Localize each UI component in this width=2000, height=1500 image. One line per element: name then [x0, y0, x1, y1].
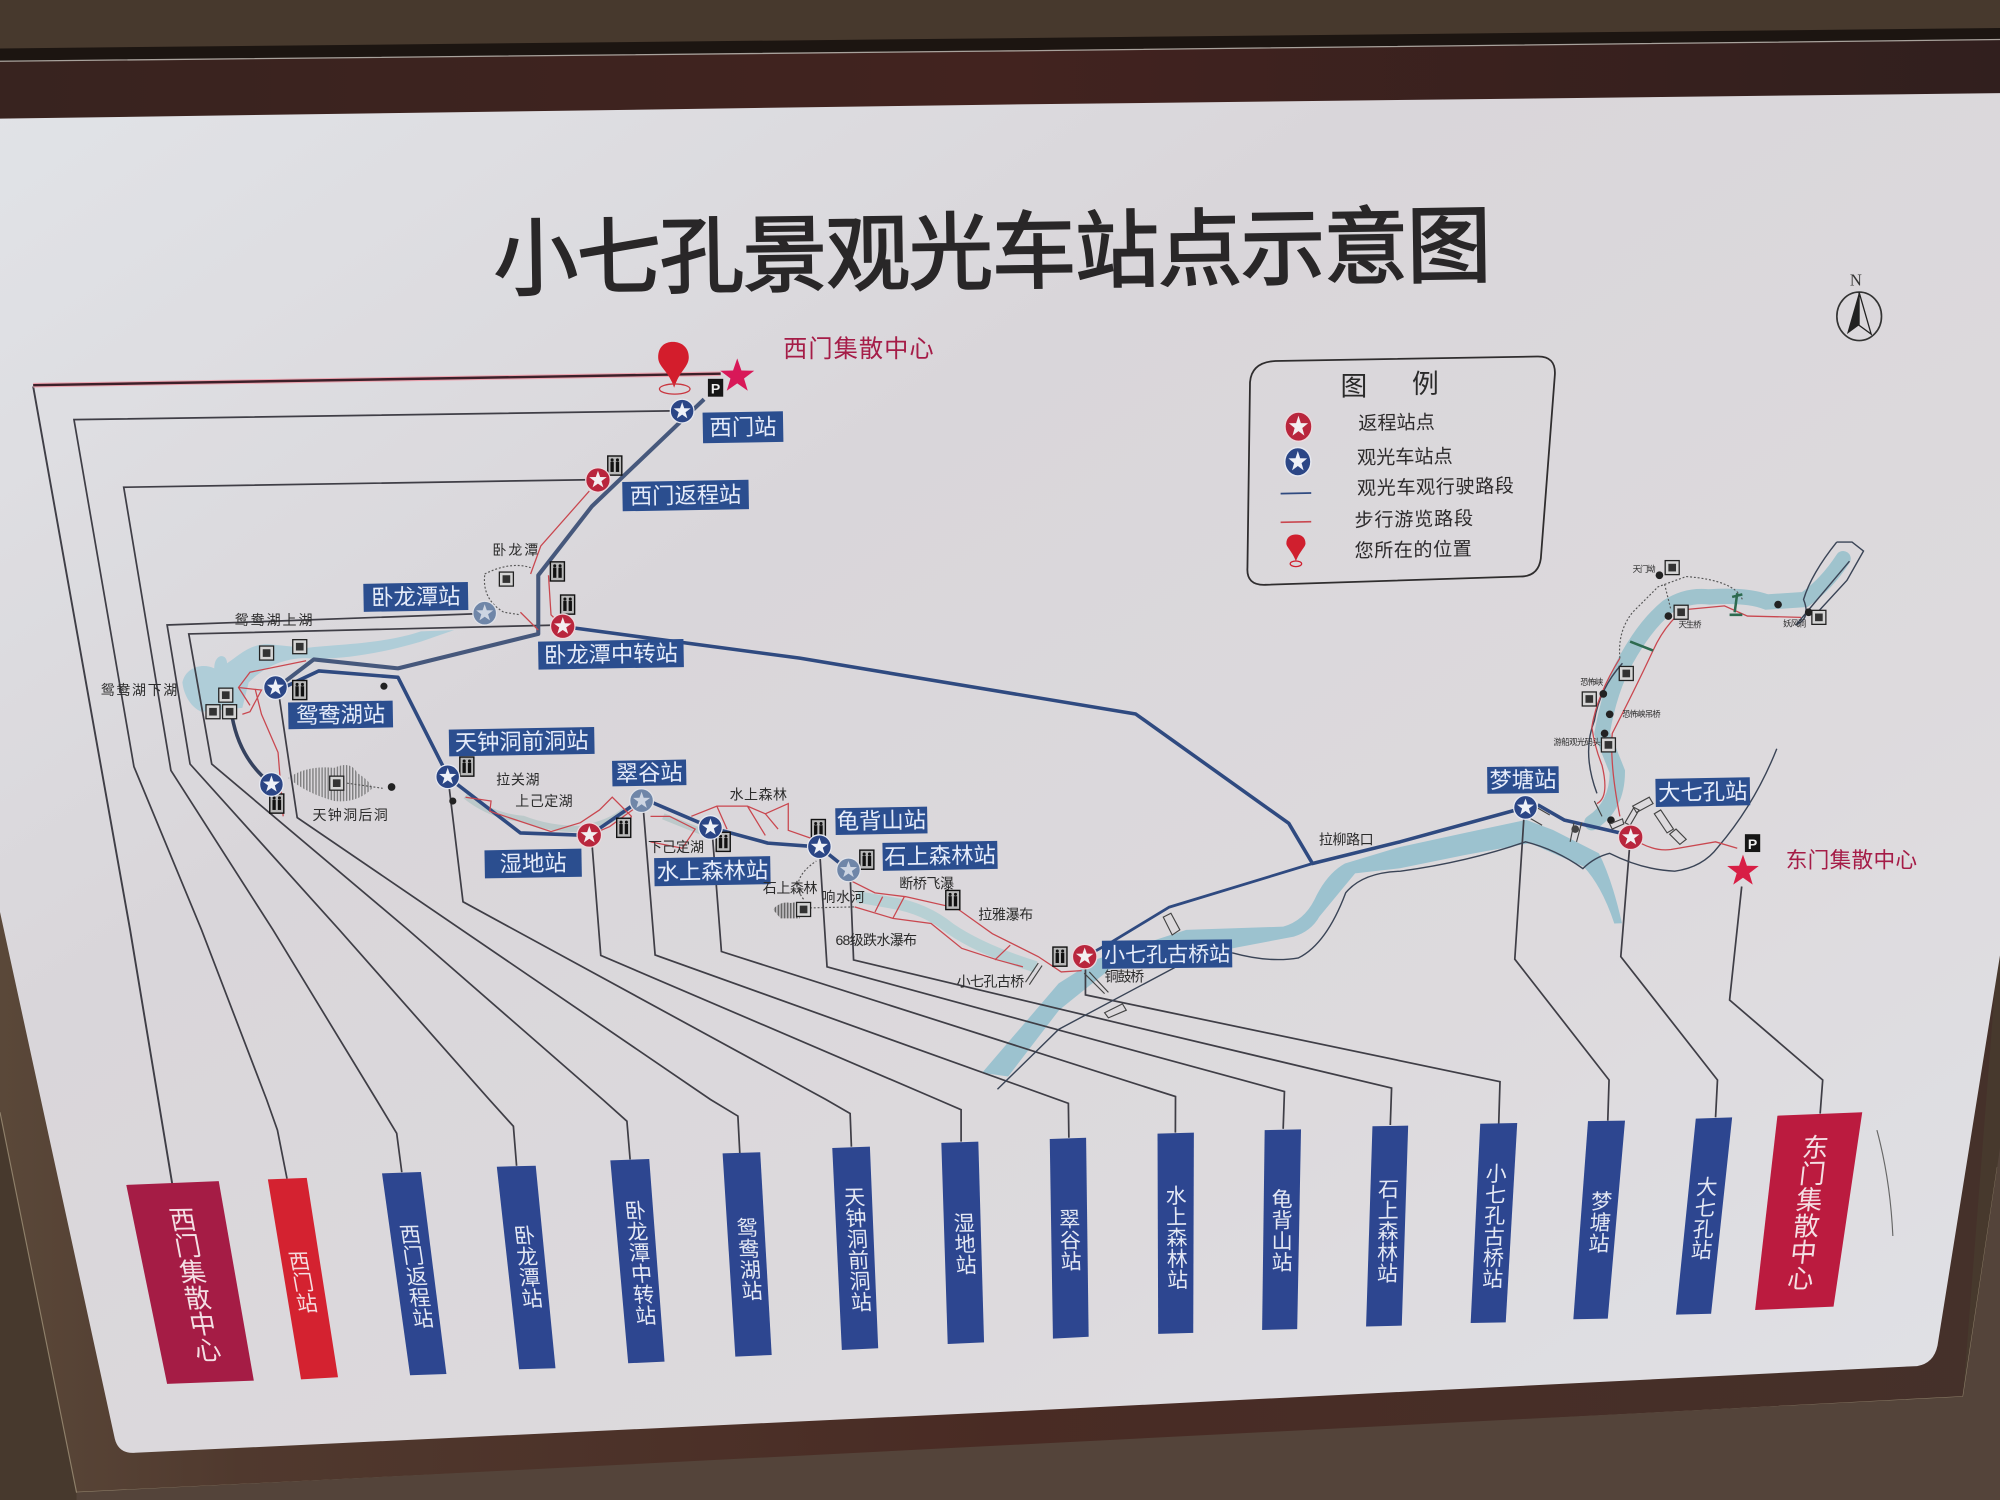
legend item: return station: [1285, 412, 1435, 441]
bar: wolongtan transfer station: 卧龙潭中转站: [621, 1199, 657, 1326]
small scenic labels: 恐怖峡: [1580, 677, 1604, 687]
small scenic labels: 小七孔古桥: [957, 974, 1024, 990]
station name labels: 小七孔古桥站: [1104, 942, 1230, 967]
west gate parking icon: [708, 379, 723, 397]
bar: west gate station: 西门站: [284, 1250, 319, 1314]
bar: west gate center: 西门集散中心: [163, 1206, 223, 1363]
station name labels: 天钟洞前洞站: [455, 728, 589, 756]
bar: west return station: 西门返程站: [395, 1223, 435, 1329]
panel scratch: [1877, 1130, 1893, 1236]
dotted trails: [347, 565, 1742, 908]
bar: guibei mountain station: [1262, 1129, 1301, 1330]
walking paths: [239, 491, 1801, 972]
station name labels: 卧龙潭站: [371, 584, 461, 610]
station name labels: 西门返程站: [630, 482, 742, 509]
station name labels: 大七孔站: [1658, 779, 1748, 806]
west gate collection line: [33, 374, 721, 385]
west gate center label: 西门集散中心: [783, 336, 934, 363]
bar: tianzhong cave station: 天钟洞前洞站: [841, 1186, 873, 1313]
water: Yuanyang lake: [182, 630, 454, 712]
bar: guibei mountain station: 龟背山站: [1269, 1187, 1293, 1273]
station name labels: [288, 411, 1750, 969]
bar: cuigu station: [1050, 1138, 1089, 1339]
small scenic labels: 天钟洞后洞: [312, 807, 388, 823]
legend item: you are here: [1286, 534, 1472, 567]
station name labels: 水上森林站: [656, 858, 768, 885]
bar: xiaoqikong bridge station: 小七孔古桥站: [1479, 1162, 1507, 1290]
legend: 例: [1412, 369, 1439, 399]
small scenic labels: [101, 542, 1806, 990]
east gate star: [1727, 855, 1759, 885]
bar: yuanyang lake station: [723, 1152, 772, 1357]
small scenic labels: 上己定湖: [515, 793, 573, 809]
title: 小七孔景观光车站点示意图: [493, 199, 1492, 307]
legend: 图: [1341, 371, 1367, 401]
cave hatch: Tianzhong back cave: [288, 765, 372, 801]
green footbridge figure: [1730, 593, 1742, 615]
shuttle road network: [232, 399, 1630, 957]
small scenic labels: 下己定湖: [648, 839, 704, 855]
bar: west gate center: [126, 1181, 254, 1384]
bottom station index bars: [126, 1112, 1862, 1384]
legend item: shuttle station: [1285, 446, 1453, 476]
bar: yuanyang lake station: 鸳鸯湖站: [733, 1216, 763, 1302]
bar: mengtang station: 梦塘站: [1585, 1190, 1613, 1254]
station name labels: 石上森林站: [884, 843, 996, 869]
legend item: you are here: 您所在的位置: [1354, 538, 1472, 562]
bar: east gate center: [1755, 1112, 1862, 1310]
water: waterfall stream: [857, 897, 1036, 967]
bar: daqikong station: 大七孔站: [1688, 1175, 1718, 1261]
small scenic labels: 天生桥: [1679, 620, 1702, 630]
legend item: shuttle road segment: 观光车观行驶路段: [1357, 475, 1514, 500]
station markers: [260, 399, 1643, 969]
east gate parking icon: [1745, 834, 1760, 852]
small scenic labels: 水上森林: [730, 787, 787, 803]
west gate location pin: [658, 342, 690, 394]
bar: west gate station: [268, 1178, 338, 1379]
bar: wetland station: [941, 1142, 984, 1344]
small scenic labels: 天门坳: [1633, 564, 1656, 574]
station name labels: 卧龙潭中转站: [544, 641, 678, 668]
bar: wolongtan station: 卧龙潭站: [510, 1224, 544, 1309]
station name labels: 梦塘站: [1489, 767, 1557, 793]
small scenic labels: 鸳鸯湖下湖: [101, 682, 177, 698]
thin tracks: [997, 542, 1864, 1089]
small scenic labels: 石上森林: [763, 880, 818, 896]
station name labels: 翠谷站: [616, 760, 683, 786]
small scenic labels: 鸳鸯湖上湖: [235, 612, 312, 628]
small scenic and facility icons: [206, 456, 1826, 966]
small scenic labels: 断桥飞瀑: [899, 875, 954, 891]
small scenic labels: 游船观光码头: [1554, 737, 1601, 747]
west gate star: [720, 358, 754, 391]
east gate parking icon: P: [1748, 836, 1757, 852]
bar: east gate center: 东门集散中心: [1782, 1133, 1830, 1291]
small scenic labels: 68级跌水瀑布: [835, 932, 917, 948]
bar: wolongtan station: [497, 1166, 555, 1369]
bar: stone forest station: 石上森林站: [1374, 1178, 1399, 1284]
small scenic labels: 响水河: [821, 889, 865, 905]
legend: [1247, 356, 1555, 585]
small scenic labels: 恐怖峡吊桥: [1622, 709, 1661, 719]
bar: tianzhong cave station: [832, 1147, 878, 1350]
bar: daqikong station: [1676, 1117, 1732, 1315]
north arrow: N: [1850, 271, 1862, 290]
small scenic labels: 拉关湖: [496, 771, 540, 787]
east gate center label: 东门集散中心: [1786, 847, 1917, 872]
small scenic labels: 妖风洞: [1783, 618, 1806, 628]
water: upper Jiding lakes: [466, 796, 702, 832]
station name labels: 鸳鸯湖站: [296, 702, 385, 728]
bar: west return station: [382, 1172, 446, 1375]
bar: cuigu station: 翠谷站: [1056, 1208, 1082, 1272]
station name labels: 龟背山站: [837, 808, 926, 834]
leader lines from stations to bottom bars: [33, 386, 1823, 1184]
bar: xiaoqikong bridge station: [1471, 1123, 1517, 1323]
small scenic labels: 拉柳路口: [1319, 831, 1374, 847]
legend item: walking segment: 步行游览路段: [1354, 508, 1473, 532]
bar: wolongtan transfer station: [610, 1159, 665, 1363]
station name labels: 西门站: [709, 414, 777, 441]
water: main river: [982, 820, 1622, 1077]
west gate parking icon: P: [711, 380, 720, 396]
small scenic labels: 铜鼓桥: [1105, 969, 1144, 985]
cave hatch: stone forest: [773, 902, 800, 918]
small scenic labels: 卧龙潭: [492, 542, 538, 558]
north arrow: [1837, 271, 1882, 341]
bar: wetland station: 湿地站: [951, 1211, 977, 1276]
bar: water forest station: [1158, 1133, 1194, 1334]
station name labels: 湿地站: [499, 851, 567, 877]
bar: water forest station: 水上森林站: [1163, 1184, 1188, 1291]
legend item: shuttle station: 观光车站点: [1357, 446, 1453, 469]
bar: stone forest station: [1366, 1126, 1408, 1327]
small scenic labels: 拉雅瀑布: [978, 907, 1033, 923]
water: northern river: [1592, 559, 1843, 823]
bridges: [1026, 797, 1686, 1018]
bar: mengtang station: [1573, 1121, 1625, 1319]
legend item: return station: 返程站点: [1358, 412, 1435, 435]
